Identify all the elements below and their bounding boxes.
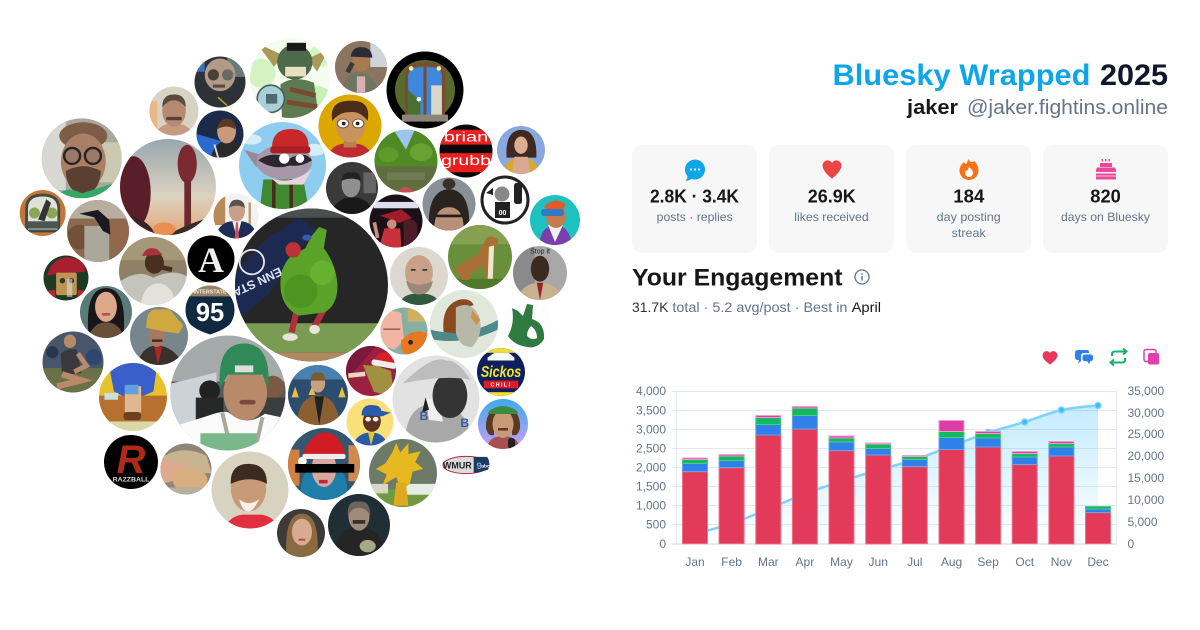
avatar: interstate 95 shield: 95 — [196, 299, 224, 327]
avatar: black and white badge: 00 — [499, 210, 506, 217]
month labels: Dec — [1087, 555, 1109, 569]
left axis labels: 2,000 — [636, 460, 666, 474]
right axis labels: 20,000 — [1128, 449, 1165, 463]
avatar: stoat in grass — [448, 225, 512, 289]
icon: birthday cake — [1096, 159, 1116, 180]
left axis labels: 0 — [659, 537, 666, 551]
engagement summary text — [632, 299, 881, 315]
right axis labels: 10,000 — [1128, 493, 1165, 507]
month labels: Sep — [977, 555, 999, 569]
avatar: black and white badge — [480, 175, 530, 225]
avatar: man in yellow hat — [130, 307, 188, 365]
right axis labels: 30,000 — [1128, 406, 1165, 420]
icon: info — [855, 270, 869, 284]
avatar: black A logo — [188, 236, 234, 282]
avatar: tree mascot — [44, 256, 88, 300]
avatar: Razzball logo — [104, 435, 158, 489]
stat value: 2.8K · 3.4K — [650, 185, 740, 206]
avatar: WMUR logo: abc — [481, 463, 490, 469]
heading: Your Engagement: Your Engagement — [632, 265, 843, 292]
stat label: posts · replies — [657, 210, 733, 224]
avatar: man with mustache — [150, 86, 198, 136]
panel: posting streak stat — [906, 145, 1031, 253]
month labels: Jun — [869, 555, 888, 569]
avatar: green ceramic shape — [502, 301, 552, 351]
right axis labels: 15,000 — [1128, 471, 1165, 485]
avatar: bison in cowboy hat: B — [419, 409, 428, 423]
left axis labels: 1,500 — [636, 480, 666, 494]
avatar: WMUR logo — [442, 441, 490, 489]
right axis labels: 0 — [1128, 537, 1134, 551]
stat value: 820 — [1090, 185, 1121, 206]
avatar: bald man in green — [390, 247, 448, 305]
avatar: brian grubb logo: grubb — [441, 153, 491, 168]
avatar: Phanatic with Penn State flag — [235, 208, 388, 362]
month labels: May — [830, 555, 853, 569]
avatar: Razzball logo: R — [117, 438, 146, 482]
avatar: Sickos Chili logo: Sickos — [481, 364, 522, 381]
avatar: man in green helmet — [170, 336, 286, 450]
avatar: man reclining in white — [119, 237, 187, 305]
panel: days on Bluesky stat — [1043, 145, 1168, 253]
left axis labels: 3,000 — [636, 422, 666, 436]
left axis labels: 4,000 — [636, 384, 666, 398]
title: Bluesky Wrapped — [832, 59, 1090, 92]
avatar: raccoon in red hat — [239, 122, 326, 209]
icon: likes heart — [1043, 351, 1057, 364]
avatar: man in sunglasses — [194, 56, 246, 108]
panel: likes received stat — [769, 145, 894, 253]
avatar: woman with long hair — [277, 509, 325, 557]
avatar: WMUR logo: WMUR — [443, 460, 472, 471]
avatar: goose on stone — [67, 200, 133, 262]
avatar: man at arena — [196, 110, 244, 158]
avatar: sunset lamp post — [116, 139, 216, 236]
month labels: Mar — [758, 555, 779, 569]
avatar: upside-down cartoon — [99, 363, 167, 431]
avatar: river and kayak — [374, 130, 438, 192]
icon: quote squares — [1144, 350, 1159, 364]
avatar: Sickos Chili logo — [477, 348, 525, 396]
avatar: bison in cowboy hat — [392, 356, 480, 442]
user name and handle: @jaker.fightins.online — [967, 97, 1168, 119]
avatar: cartoon man with glasses on yellow — [318, 94, 382, 158]
panel: posts and replies stat — [632, 145, 757, 253]
avatar: bison in cowboy hat: B — [460, 416, 469, 430]
chart legend — [1043, 348, 1159, 366]
avatar: man with cat on head — [422, 178, 476, 230]
avatar: fans in red — [370, 194, 422, 248]
engagement summary text: total · 5.2 avg/post · Best in — [672, 299, 847, 315]
avatar: giant slide badge — [20, 190, 66, 236]
avatar: Phanatic with Penn State flag: PENN STATE — [217, 261, 292, 306]
month labels: Apr — [796, 555, 814, 569]
avatar: brian grubb logo: brian — [444, 129, 488, 144]
left axis labels: 2,500 — [636, 442, 666, 456]
avatar: brian grubb logo — [440, 124, 492, 178]
icon: heart — [823, 160, 841, 178]
avatar: weasel in purple on teal — [530, 195, 580, 245]
month labels: Feb — [721, 555, 742, 569]
icon: chat bubble — [685, 159, 705, 181]
left axis labels: 3,500 — [636, 404, 666, 418]
avatar: woman in yellow jacket — [497, 126, 545, 174]
stat label: days on Bluesky — [1061, 210, 1150, 224]
avatar: interstate 95 shield — [186, 286, 234, 334]
month labels: Oct — [1015, 555, 1035, 569]
right axis labels: 5,000 — [1128, 515, 1158, 529]
stat label: likes received — [794, 210, 869, 224]
avatar: man with stop caption — [513, 246, 567, 300]
avatar: woman with dark hair — [80, 286, 132, 338]
avatar: man in brown jacket — [288, 365, 348, 425]
stat label: day posting — [937, 210, 1001, 224]
avatar: man with stop caption: Stop it — [530, 249, 550, 256]
avatar: black and white man — [326, 162, 378, 214]
month labels: Nov — [1051, 555, 1072, 569]
avatar: blonde with cat — [160, 444, 212, 494]
right axis labels: 25,000 — [1128, 427, 1165, 441]
engagement summary text: 31.7K — [632, 299, 669, 315]
stat value: 184 — [953, 185, 985, 206]
avatar: goblin with drink — [247, 38, 333, 118]
avatar: gnome illustration — [430, 290, 498, 358]
stat value: 26.9K — [808, 185, 856, 206]
avatar: santa hat with blue hair — [288, 428, 360, 500]
avatar: smiling man in red — [212, 452, 288, 528]
month labels: Jan — [685, 555, 705, 569]
user name and handle: jaker — [906, 97, 958, 119]
month labels: Jul — [907, 555, 922, 569]
avatar: cartoon man in blue cap — [346, 398, 394, 446]
month labels: Aug — [941, 555, 962, 569]
avatar: bearded man with baby creature — [328, 494, 390, 556]
avatar: toad in santa hat — [346, 346, 397, 396]
left axis labels — [636, 384, 666, 551]
avatar: sun mascot on soccer field — [369, 439, 437, 507]
left axis labels: 500 — [646, 518, 666, 532]
engagement summary text: April — [852, 299, 881, 315]
stacked bars — [682, 406, 1110, 544]
avatar: man kneeling in crowd — [42, 332, 104, 392]
icon: replies bubbles — [1075, 350, 1093, 364]
icon: flame — [960, 159, 978, 180]
icon: repost arrows — [1110, 348, 1126, 366]
avatar: black A logo: A — [198, 240, 224, 280]
left axis labels: 1,000 — [636, 498, 666, 512]
month labels — [685, 555, 1109, 569]
avatar: WMUR logo: 9 — [477, 461, 482, 472]
right axis labels — [1128, 384, 1165, 551]
title: 2025 — [1100, 59, 1168, 92]
avatar: interstate 95 shield: INTERSTATE — [194, 289, 227, 295]
avatar: Razzball logo: RAZZBALL — [113, 476, 149, 483]
stat label line two: streak — [952, 226, 987, 240]
avatar: man in cap on phone — [335, 41, 387, 93]
cumulative line and area — [695, 402, 1101, 544]
avatar: man in glasses and cap — [42, 118, 122, 198]
avatar: ginger man with green cap — [478, 399, 528, 449]
right axis labels: 35,000 — [1128, 384, 1165, 398]
chart: monthly engagement — [636, 384, 1165, 569]
avatar: Sickos Chili logo: CHILI — [491, 382, 511, 388]
panel: avatar cluster — [20, 38, 580, 557]
avatar: arch in black ring — [386, 52, 464, 128]
avatar: man in navy suit — [214, 194, 258, 238]
avatar: Peter Griffin and dog — [380, 308, 428, 354]
